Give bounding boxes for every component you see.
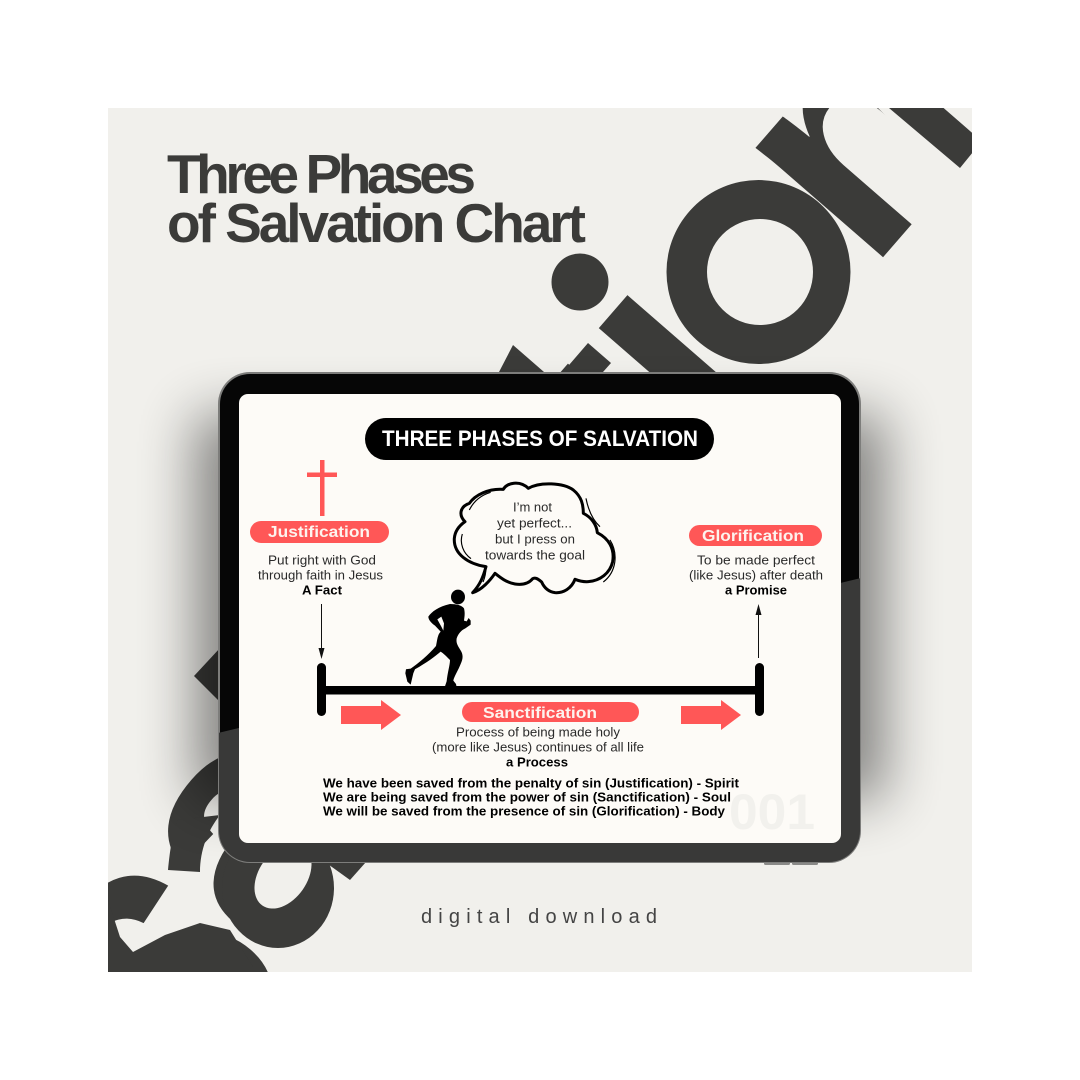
arrow: down to line start bbox=[318, 604, 324, 659]
panel: glorification: a Promise bbox=[725, 584, 787, 598]
heading pill bbox=[365, 418, 714, 460]
background card bbox=[108, 108, 972, 972]
speech bubble: yet perfect... bbox=[497, 516, 572, 530]
tablet shadow bbox=[195, 415, 885, 800]
side buttons bbox=[764, 861, 790, 865]
panel: sanctification: a Process bbox=[506, 756, 568, 770]
summary text: We will be saved from the presence of sin (Glorification) - Body bbox=[323, 804, 726, 818]
panel: sanctification bbox=[432, 702, 644, 770]
speech bubble: I’m not bbox=[513, 500, 553, 514]
speech bubble: but I press on bbox=[495, 532, 575, 546]
icon: cross bbox=[307, 460, 337, 516]
heading pill: THREE PHASES OF SALVATION bbox=[382, 426, 698, 451]
speech bubble: towards the goal bbox=[485, 548, 585, 562]
footer caption: digital download bbox=[421, 906, 657, 928]
big diagonal word: Salvation bbox=[108, 108, 972, 972]
panel: sanctification: (more like Jesus) continues of all life bbox=[432, 740, 644, 754]
panel: sanctification: Sanctification bbox=[483, 705, 597, 722]
panel: glorification: To be made perfect bbox=[697, 554, 816, 568]
summary text: We have been saved from the penalty of sin (Justification) - Spirit bbox=[323, 776, 740, 790]
speech bubble bbox=[454, 483, 615, 593]
panel: glorification bbox=[689, 525, 823, 598]
title bbox=[167, 143, 586, 254]
panel: glorification: (like Jesus) after death bbox=[689, 568, 823, 582]
summary text bbox=[323, 776, 740, 818]
arrow: up from line end bbox=[756, 604, 762, 658]
panel: glorification: Glorification bbox=[702, 528, 804, 545]
watermark number: 001 bbox=[729, 784, 815, 840]
title: Three Phases bbox=[167, 143, 476, 205]
panel: justification: Justification bbox=[268, 524, 370, 541]
panel: justification: through faith in Jesus bbox=[258, 568, 383, 582]
summary text: We are being saved from the power of sin (Sanctification) - Soul bbox=[323, 790, 731, 804]
tablet frame bbox=[218, 372, 861, 863]
arrow: red right bbox=[681, 700, 741, 730]
timeline bar bbox=[317, 663, 764, 716]
bezel reflection bbox=[218, 578, 861, 863]
title: of Salvation Chart bbox=[167, 192, 586, 254]
tablet bbox=[218, 372, 861, 865]
panel: justification: A Fact bbox=[302, 584, 343, 598]
icon: runner silhouette bbox=[405, 590, 471, 687]
panel: justification: Put right with God bbox=[268, 554, 376, 568]
panel: justification bbox=[250, 521, 389, 598]
arrow: red left bbox=[341, 700, 401, 730]
panel: sanctification: Process of being made holy bbox=[456, 726, 621, 740]
screen bbox=[239, 394, 841, 843]
